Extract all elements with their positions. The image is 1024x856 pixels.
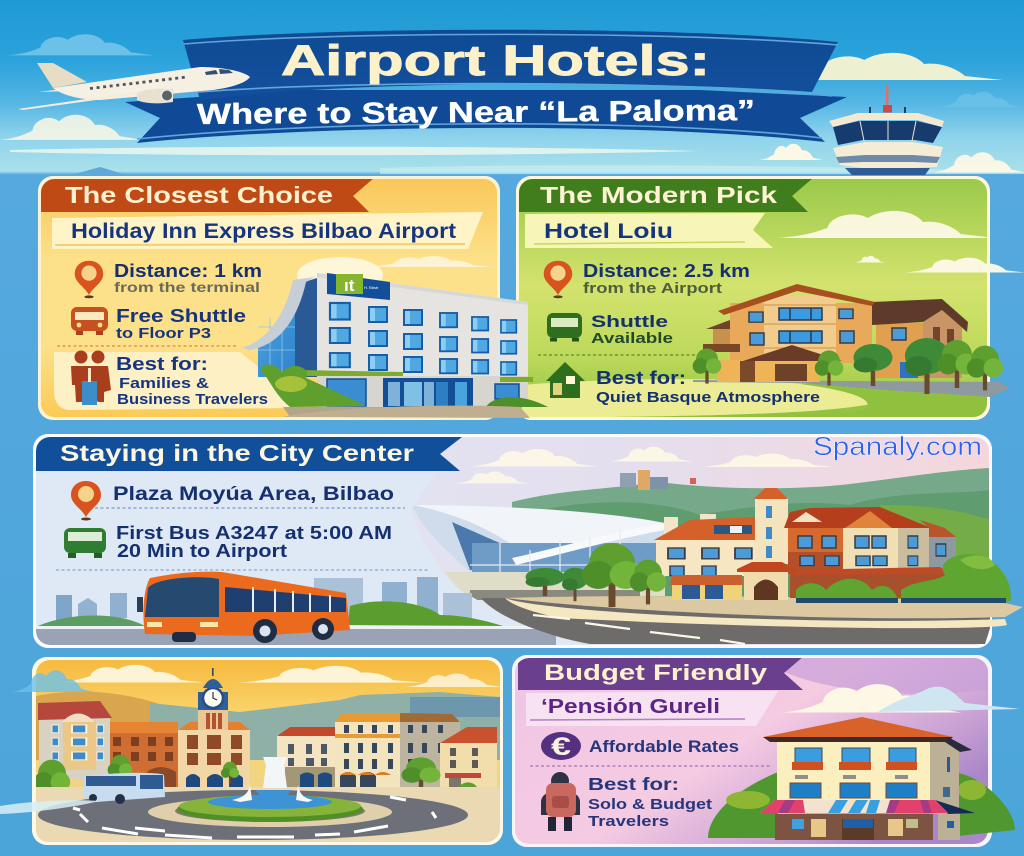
icon: shuttle bus [71,307,108,335]
best for text: Solo & Budget [588,796,712,813]
icon: backpack traveler [541,772,580,831]
title line 2: Where to Stay Near “La Paloma” [197,95,755,131]
icon: euro [541,732,581,761]
clouds beside plaza [0,670,100,814]
panel: the closest choice [38,176,548,420]
distance text: Distance: 2.5 km [583,261,750,281]
icon: bus [64,528,106,558]
icon: airplane [18,63,250,110]
shuttle text: Free Shuttle [116,306,246,326]
best for text: Business Travelers [117,392,268,408]
icon: location pin [71,481,101,520]
header ribbon: The Modern Pick [540,182,777,208]
illustration: airport terminal [412,505,665,600]
header ribbon [518,656,804,690]
ribbon lower [125,90,847,143]
icon: travelers [71,350,111,405]
road [481,596,1023,644]
ribbon upper [183,30,838,100]
shuttle text: Available [591,330,673,347]
icon: control tower [829,85,944,175]
header ribbon [36,437,462,471]
icon: city bus [84,773,165,804]
left info card [36,437,586,645]
cloud over panel [782,684,1020,712]
lower card [54,352,298,410]
clouds [0,34,1024,173]
location text: Plaza Moyúa Area, Bilbao [113,484,394,505]
best for text [588,774,712,830]
hotel name ribbon: ‘Pensión Gureli [541,695,720,718]
hotel name ribbon [52,212,483,249]
best for text: Travelers [588,813,669,830]
header ribbon: Staying in the City Center [60,440,414,466]
bus text [116,523,392,561]
cloud over frame [905,258,1024,272]
bus text: First Bus A3247 at 5:00 AM [116,523,392,543]
icon: location pin [544,261,572,298]
distance text [114,264,261,292]
header ribbon: Budget Friendly [544,660,768,685]
illustration: city buildings [36,668,497,787]
best for text [118,356,268,404]
icon: house [546,362,585,398]
affordable text: Affordable Rates [589,738,739,756]
best for text [596,368,820,406]
hotel name ribbon [526,691,778,726]
panel: plaza scene [32,657,503,845]
background hills [512,468,989,515]
shuttle text [592,315,672,343]
shuttle text [116,308,246,338]
hotel name ribbon: Holiday Inn Express Bilbao Airport [71,220,456,243]
panel: the modern pick [516,176,1024,420]
icon: shuttle bus [547,313,582,342]
illustration: holiday inn hotel: ıt [344,276,355,295]
road roundabout [36,787,501,843]
distance text: from the terminal [114,279,260,295]
panel: budget friendly [512,655,1020,847]
hotel name ribbon [525,213,773,248]
illustration: holiday inn hotel [242,273,548,418]
icon: fountain [175,757,365,822]
best for text: Quiet Basque Atmosphere [596,389,820,406]
illustration: hotel loiu [693,284,1010,397]
best for text: Best for: [588,774,679,794]
best for text: Families & [119,376,210,392]
distance text: Distance: 1 km [114,261,262,281]
illustration: pension hotel [708,717,1015,840]
best for text: Best for: [596,368,686,388]
title banner [125,30,847,143]
illustration: city hotel [526,488,1011,607]
skyline [36,577,556,645]
bus text: 20 Min to Airport [117,541,287,561]
title line 1: Airport Hotels: [281,37,710,85]
header ribbon [40,178,374,212]
best for text: Best for: [116,354,208,374]
illustration: orange bus [137,572,350,643]
header ribbon [518,178,813,212]
shuttle text: Shuttle [591,312,668,331]
icon: euro: € [551,733,571,761]
distance text [583,264,749,296]
illustration: holiday inn hotel: H. Bbstr [364,285,379,290]
icon: location pin [75,261,103,298]
shuttle text: to Floor P3 [116,325,211,342]
hotel name ribbon: Hotel Loiu [544,219,673,243]
watermark: Spanaly.com [813,431,982,461]
panel: city center [33,431,1023,648]
header ribbon: The Closest Choice [65,182,333,208]
distance text: from the Airport [583,281,722,297]
